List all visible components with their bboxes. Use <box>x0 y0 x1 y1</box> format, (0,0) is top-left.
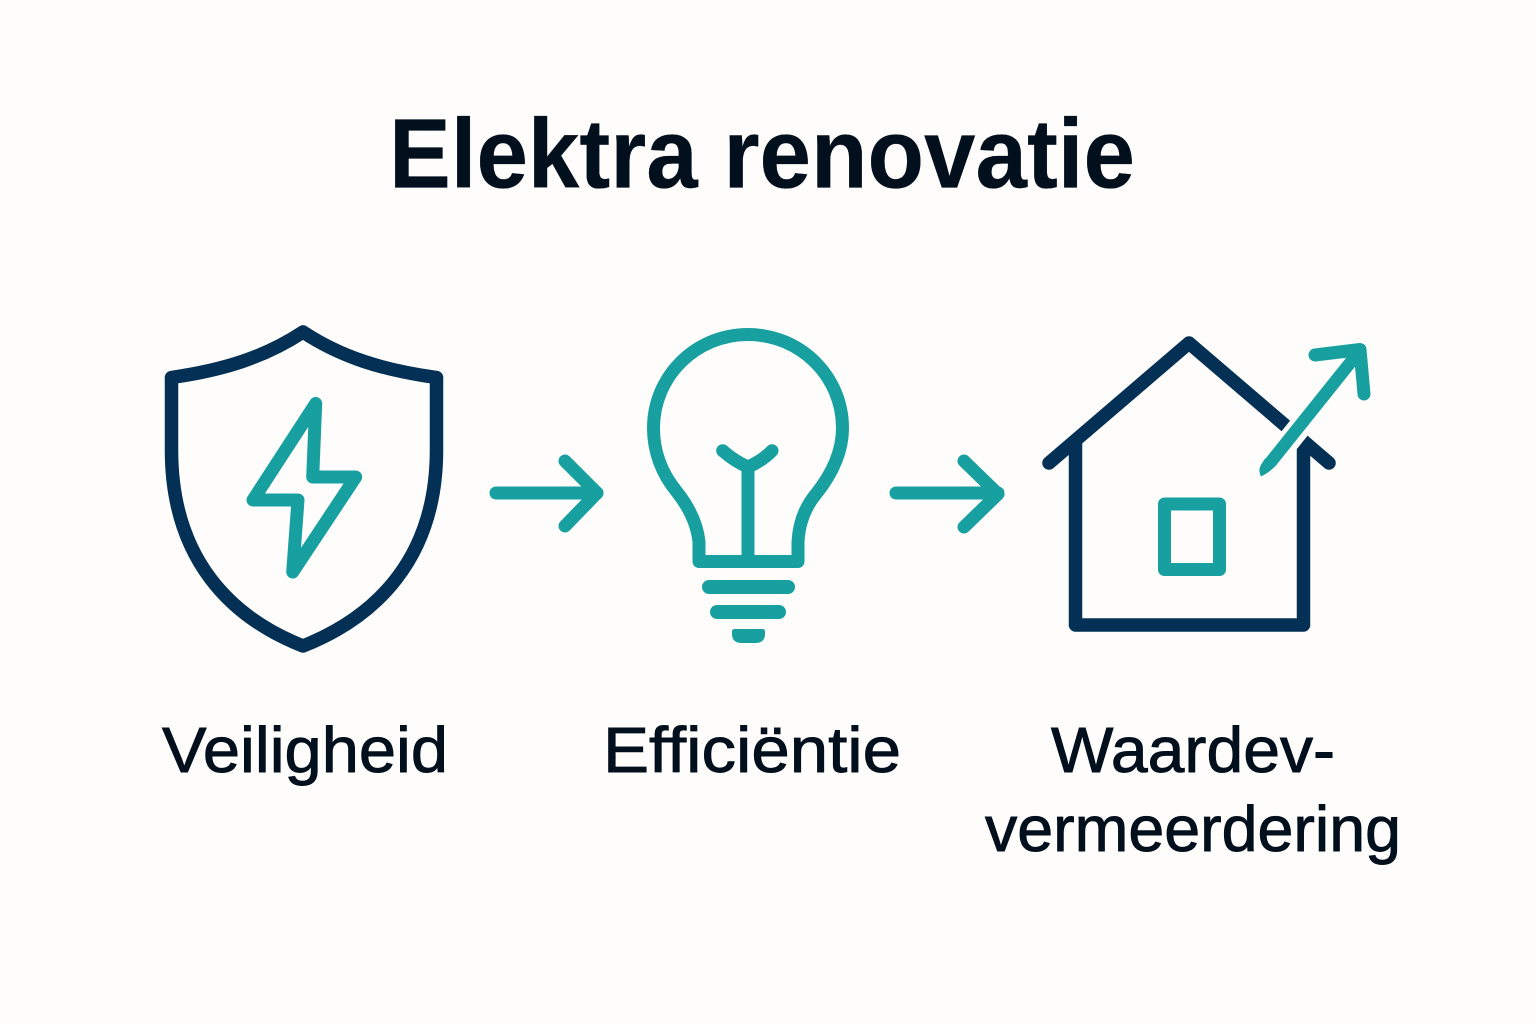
title: Elektra renovatie <box>389 98 1135 208</box>
arrow: efficiency to value <box>896 461 998 527</box>
label: Waardevermeerdering <box>985 714 1401 865</box>
label: Efficiëntie: Efficiëntie <box>603 714 901 786</box>
label: Waardevermeerdering: vermeerdering <box>985 793 1401 865</box>
arrow: safety to efficiency <box>496 461 597 526</box>
icon: light bulb <box>654 334 842 643</box>
icon: house with rising arrow <box>1049 343 1364 625</box>
icon: shield with lightning bolt <box>172 332 436 646</box>
label: Waardevermeerdering: Waardev- <box>1051 714 1335 786</box>
label: Veiligheid: Veiligheid <box>162 714 448 786</box>
